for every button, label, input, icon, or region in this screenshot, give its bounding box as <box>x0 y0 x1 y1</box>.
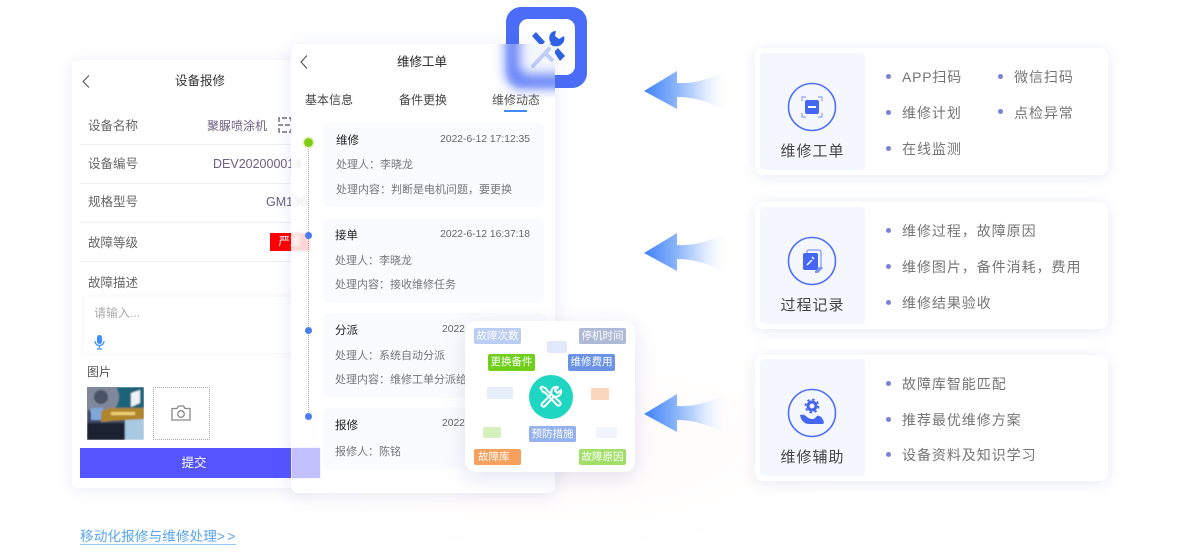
button: submit: 提交 <box>181 456 206 470</box>
panel: device report phone screen <box>72 60 312 488</box>
translucent button end over card <box>292 448 320 478</box>
content: 处理内容：判断是电机问题，要更换 <box>336 184 512 196</box>
side tile: maintenance assistance <box>760 359 865 476</box>
icon: scan <box>278 117 292 133</box>
icon: document with pen <box>788 236 836 286</box>
field: fault level: 故障等级 <box>88 236 138 250</box>
timestamp: 2022-6-12 17:12:35 <box>440 134 530 145</box>
caption: 维修工单 <box>780 143 844 160</box>
timeline card: report <box>323 407 545 469</box>
chip: blank faint <box>596 427 617 438</box>
icon: crossed tools <box>540 386 562 408</box>
bullet list: 设备资料及知识学习 <box>902 447 1037 463</box>
back chevron <box>82 75 90 88</box>
panel: maintenance knowledge popup <box>465 321 635 472</box>
tab: basic info: 基本信息 <box>305 93 353 107</box>
bullet list <box>886 69 1074 157</box>
handler: 处理人：李晓龙 <box>335 255 412 267</box>
chip: blank blue <box>547 341 567 353</box>
title: 分派 <box>335 325 358 337</box>
frosted badge glow through card corner <box>496 44 1002 114</box>
arrow 1 <box>644 71 718 109</box>
tab: maintenance updates: 维修动态 <box>492 93 540 107</box>
badge: severe: 严重 <box>278 236 302 248</box>
handler: 处理人：李晓龙 <box>336 159 413 171</box>
value: device number: DEV202000014 <box>213 157 301 171</box>
chip: blank pale blue <box>487 387 513 399</box>
link: mobile repair and maintenance: 移动化报修与维修处理>> <box>80 529 238 544</box>
title: 维修 <box>336 135 359 147</box>
icon: scan document <box>788 82 836 132</box>
bullet list: 维修过程，故障原因 <box>902 223 1037 239</box>
image upload placeholder <box>153 387 210 440</box>
chip: downtime <box>579 328 626 344</box>
chip: fault count <box>474 328 521 344</box>
bullet list: 微信扫码 <box>1014 69 1074 85</box>
faint tools seen through glass <box>531 47 554 68</box>
chip: downtime: 停机时间 <box>582 330 624 342</box>
icon: camera <box>171 405 191 421</box>
caption: 维修辅助 <box>780 449 844 466</box>
bullet list: 推荐最优维修方案 <box>902 412 1022 428</box>
tab: parts replacement: 备件更换 <box>399 93 447 107</box>
bullet list: 在线监测 <box>902 141 962 157</box>
timestamp: 2022-6-12 16:30:05 <box>442 324 532 335</box>
side tile: process record <box>760 207 865 324</box>
bullet list: 维修结果验收 <box>902 295 992 311</box>
chip: repair cost <box>568 354 615 371</box>
bullet list: 维修计划 <box>902 105 962 121</box>
bullet list: APP扫码 <box>902 69 962 85</box>
timestamp: 2022-6-12 16:37:18 <box>440 229 530 240</box>
timeline node 4 <box>304 413 312 420</box>
arrow 3 <box>644 394 718 432</box>
panel: work order features <box>755 48 1108 175</box>
timeline line <box>308 142 309 416</box>
heading: work order: 维修工单 <box>397 55 447 69</box>
image: machine photo <box>87 387 144 440</box>
icon: teal tools circle <box>529 375 573 419</box>
timeline card: repair <box>323 123 545 207</box>
field: device name: 设备名称 <box>88 119 138 133</box>
badge: severe <box>270 233 310 251</box>
chip: fault count: 故障次数 <box>476 330 518 342</box>
input box <box>84 297 294 353</box>
timeline node 3 <box>304 327 312 334</box>
bullet list <box>886 223 1081 311</box>
chip: blank green <box>483 427 501 438</box>
value: specification: GM136 <box>266 195 307 209</box>
field: specification: 规格型号 <box>88 195 138 209</box>
chip: fault library <box>474 449 521 465</box>
icon: microphone <box>94 335 105 350</box>
title: 接单 <box>335 230 358 242</box>
chip: blank orange <box>591 388 609 400</box>
placeholder text: 请输入... <box>94 306 140 320</box>
chip: fault cause: 故障原因 <box>582 451 624 463</box>
handler: 处理人：系统自动分派 <box>335 350 445 362</box>
icon: blue wrench badge <box>506 7 587 88</box>
button: submit <box>80 448 320 478</box>
timeline node: green <box>304 138 313 147</box>
inner white tile <box>519 19 575 75</box>
caption: 过程记录 <box>780 297 844 314</box>
heading: device report: 设备报修 <box>175 74 225 88</box>
chip: parts replacement <box>488 354 535 371</box>
content: 处理内容：维修工单分派给李晓龙 <box>335 374 500 386</box>
chip: preventive measures: 预防措施 <box>532 428 574 440</box>
content: 处理内容：接收维修任务 <box>335 279 456 291</box>
side tile: work order <box>760 53 865 170</box>
chip: fault cause <box>579 449 626 465</box>
bullet list: 维修图片，备件消耗，费用 <box>902 259 1081 275</box>
icon: wrench and screwdriver <box>532 31 565 61</box>
chip: preventive measures <box>529 426 576 442</box>
panel: maintenance assistance features <box>755 355 1108 481</box>
back chevron <box>300 55 308 69</box>
timestamp: 2022-6-12 16:28:42 <box>442 418 532 429</box>
background glow <box>200 330 900 558</box>
icon: hand with gear <box>788 388 836 438</box>
panel: process record features <box>755 202 1108 329</box>
value: device name: 聚脲喷涂机 <box>207 119 267 133</box>
field: device number: 设备编号 <box>88 157 138 171</box>
timeline card: accept <box>323 218 545 303</box>
arrow 2 <box>489 233 718 419</box>
bullet list: 点检异常 <box>1014 105 1074 121</box>
panel: work order phone screen <box>291 44 555 493</box>
chip: parts replacement: 更换备件 <box>490 356 532 368</box>
chip: fault library: 故障库 <box>478 451 510 463</box>
active tab underline <box>504 110 527 112</box>
chip: repair cost: 维修费用 <box>570 356 612 368</box>
timeline card: dispatch <box>323 313 545 398</box>
label: images: 图片 <box>87 365 111 379</box>
bullet list <box>886 376 1037 463</box>
title: 报修 <box>335 420 358 432</box>
reporter: 报修人：陈铭 <box>335 446 401 458</box>
bullet list: 故障库智能匹配 <box>902 376 1007 392</box>
timeline node 2 <box>304 232 312 239</box>
field: fault description: 故障描述 <box>88 276 138 290</box>
